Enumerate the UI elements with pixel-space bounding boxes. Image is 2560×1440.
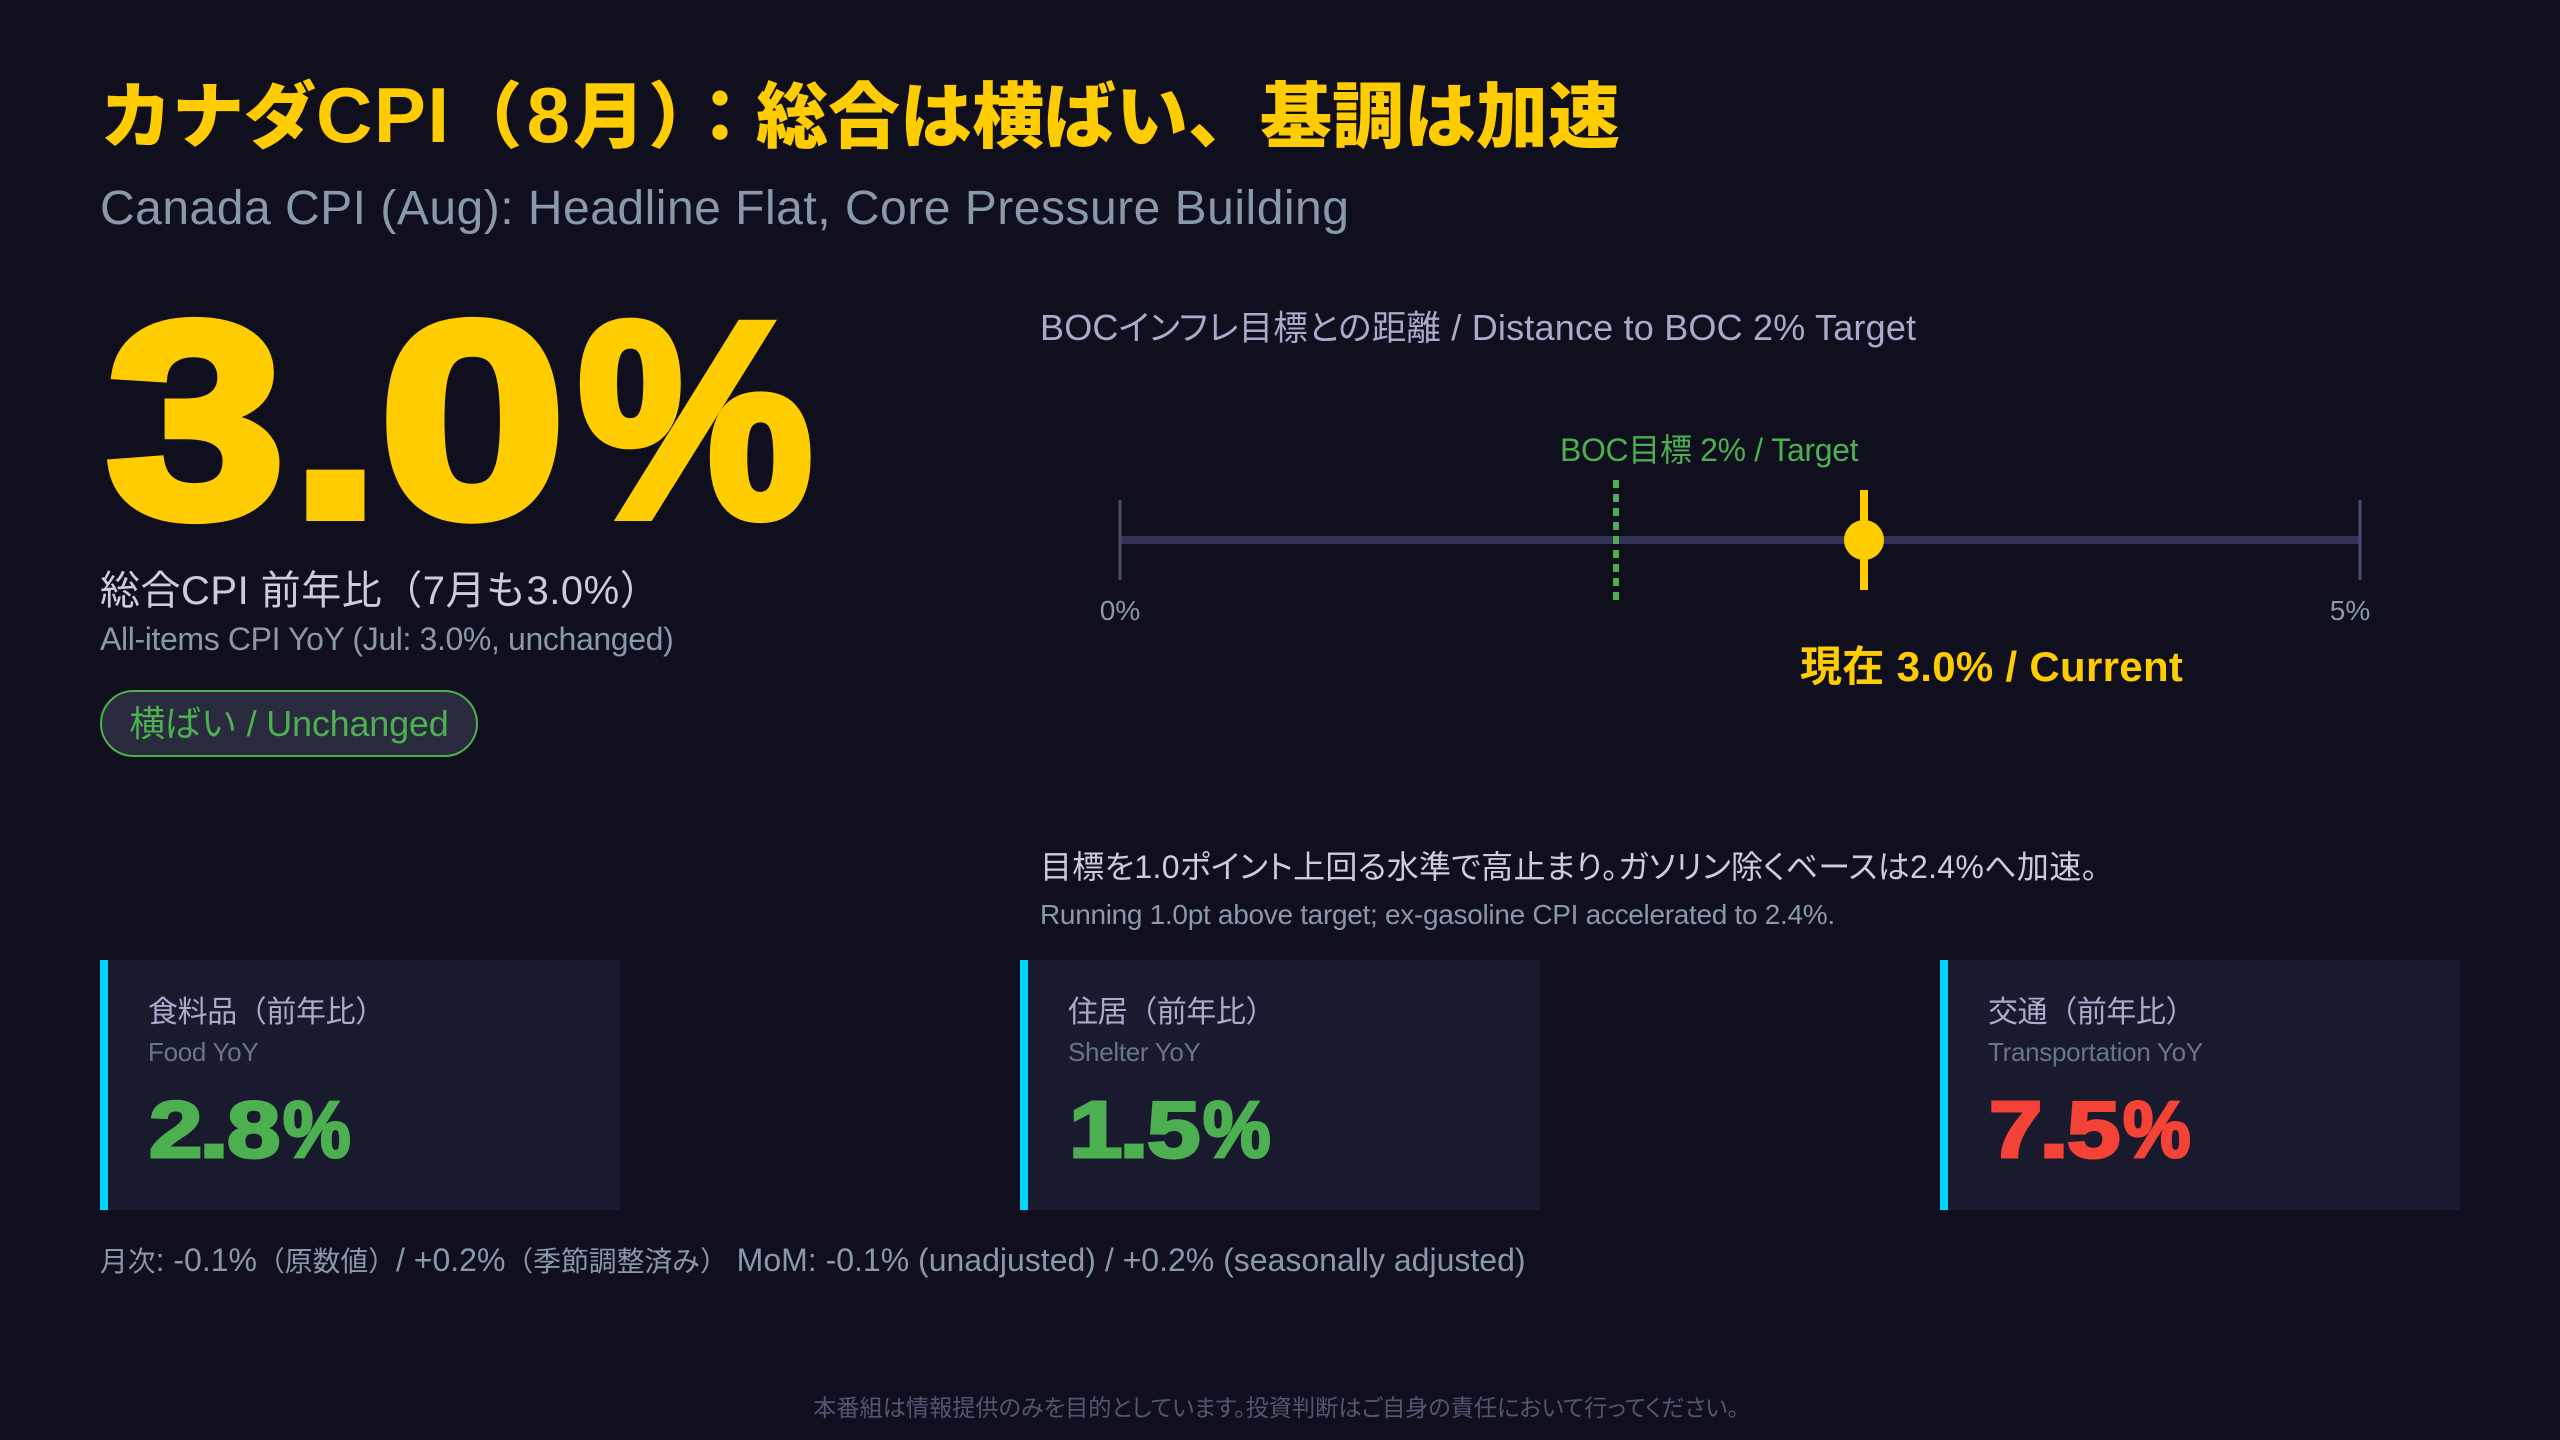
gauge chart xyxy=(1100,432,2370,690)
status pill xyxy=(100,690,478,757)
card: food xyxy=(100,960,620,1210)
gauge heading: BOCインフレ目標との距離 / Distance to BOC 2% Target xyxy=(1040,307,1916,348)
shelter value xyxy=(1069,1085,1271,1174)
commentary English: Running 1.0pt above target; ex-gasoline CPI accelerated to 2.4%. xyxy=(1040,899,1835,930)
card: shelter xyxy=(1020,960,1540,1210)
hero value: 3.0%: 0 xyxy=(379,264,566,575)
transportation label: 交通（前年比） xyxy=(1988,996,2195,1029)
hero label Japanese: 総合CPI 前年比（7月も3.0%） xyxy=(100,569,660,613)
title: カナダCPI（8月）：総合は横ばい、基調は加速 xyxy=(100,71,1620,159)
food value xyxy=(149,1085,351,1174)
food value: 8 xyxy=(227,1085,280,1174)
transportation value: % xyxy=(2123,1085,2191,1174)
subtitle: Canada CPI (Aug): Headline Flat, Core Pressure Building xyxy=(100,182,1349,235)
shelter label: 住居（前年比） xyxy=(1068,996,1275,1029)
shelter value: 1 xyxy=(1069,1085,1122,1174)
card: transportation xyxy=(1940,960,2460,1210)
month-on-month note: 月次: -0.1%（原数値）/ +0.2%（季節調整済み） MoM: -0.1% (unadjusted) / +0.2% (seasonally adjusted) xyxy=(100,1242,1526,1278)
current marker xyxy=(1844,490,1884,590)
food English label: Food YoY xyxy=(148,1037,258,1067)
food value: . xyxy=(199,1085,229,1174)
transportation value: 5 xyxy=(2067,1085,2120,1174)
axis label 5%: 5% xyxy=(2330,595,2370,626)
target label: BOC目標 2% / Target xyxy=(1560,432,1859,468)
hero label English: All-items CPI YoY (Jul: 3.0%, unchanged) xyxy=(100,621,673,657)
transportation value: . xyxy=(2039,1085,2069,1174)
disclaimer: 本番組は情報提供のみを目的としています。投資判断はご自身の責任において行ってください。 xyxy=(813,1395,1739,1421)
transportation English label: Transportation YoY xyxy=(1988,1037,2203,1067)
shelter value: % xyxy=(1203,1085,1271,1174)
food value: % xyxy=(283,1085,351,1174)
shelter English label: Shelter YoY xyxy=(1068,1037,1201,1067)
shelter value: 5 xyxy=(1147,1085,1200,1174)
hero value: 3.0%: 3 xyxy=(106,264,285,575)
hero value: 3.0%: % xyxy=(578,264,813,575)
food label: 食料品（前年比） xyxy=(148,996,385,1029)
target line xyxy=(1613,480,1619,600)
transportation value xyxy=(1989,1085,2191,1174)
food value: 2 xyxy=(149,1085,202,1174)
commentary Japanese: 目標を1.0ポイント上回る水準で高止まり。ガソリン除くベースは2.4%へ加速。 xyxy=(1040,849,2098,885)
gauge track xyxy=(1120,536,2360,544)
transportation value: 7 xyxy=(1989,1085,2042,1174)
shelter value: . xyxy=(1119,1085,1149,1174)
hero value: 3.0% xyxy=(106,264,813,575)
status pill: 横ばい / Unchanged xyxy=(129,703,449,744)
current value label: 現在 3.0% / Current xyxy=(1800,643,2183,690)
scale end ticks xyxy=(1118,500,2362,580)
hero value: 3.0%: . xyxy=(290,264,381,575)
axis label 0%: 0% xyxy=(1100,595,1140,626)
